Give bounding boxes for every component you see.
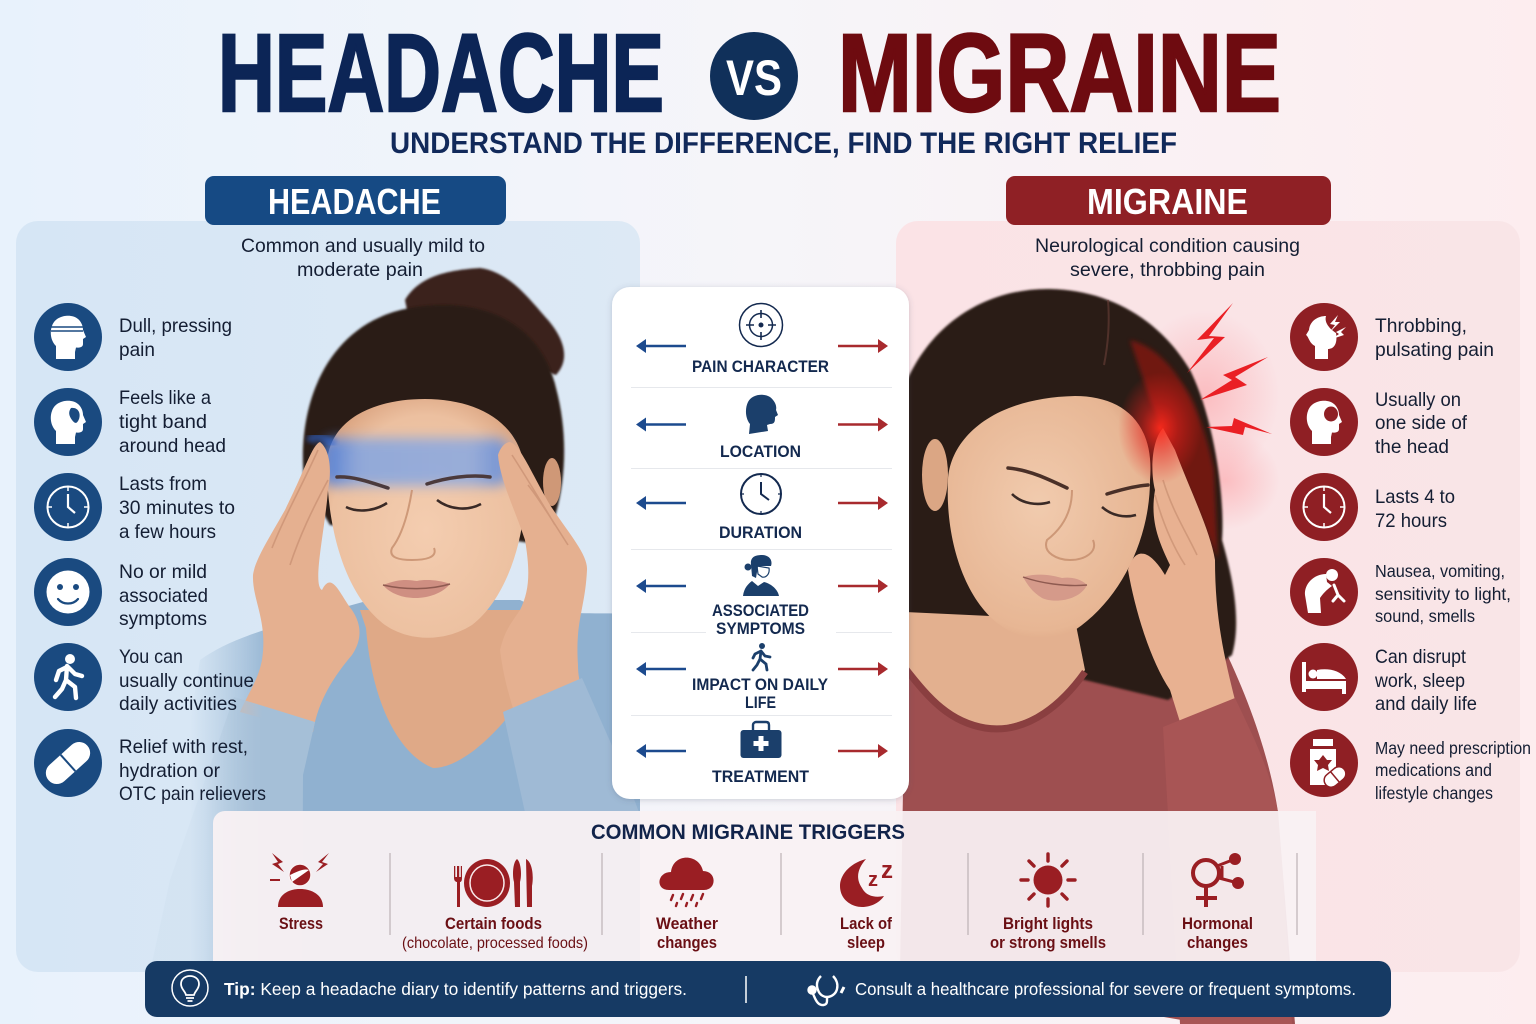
label: pain character: PAIN CHARACTER [692,357,829,376]
label: lack of sleep [840,914,892,952]
label: stress: Stress [279,914,323,933]
label: certain foods [402,914,588,952]
text: tight band: tight band [119,411,207,433]
label: lack of sleep: Lack of [840,914,892,933]
icon: walking person [34,643,102,711]
label: bright lights [990,914,1106,952]
icon: stress person [270,853,329,907]
icon: light bulb [172,970,208,1006]
icon: clock [741,474,781,514]
icon: plate and cutlery [454,859,533,907]
text: tight band [119,387,226,457]
text: nausea: sensitivity to light, [1375,584,1511,604]
icon: smiley [34,558,102,626]
badge: VS: VS [726,50,782,106]
heading: migraine pill: MIGRAINE [1087,181,1248,222]
icon: stethoscope [808,976,844,1005]
label: lack of sleep: sleep [847,933,885,952]
text: throbbing: Throbbing, [1375,315,1467,337]
icon: medication bottle [1290,729,1358,797]
text: disrupt: work, sleep [1374,670,1465,692]
text: prescription: lifestyle changes [1375,783,1493,803]
text: 4 to 72 hours [1375,486,1455,532]
label: location: LOCATION [720,442,801,461]
icon: target [740,304,782,346]
icon: rain cloud [659,858,714,906]
label: duration: DURATION [719,523,802,542]
icon: walking person [753,643,770,670]
icon: head with one-side spot [1290,388,1358,456]
text: dull pressing pain [119,315,232,361]
text: throbbing: pulsating pain [1375,339,1494,361]
icon: lightning bolts [1187,303,1272,435]
icon: clock [34,473,102,541]
text: tight band: Feels like a [119,387,211,409]
headache description [241,235,485,281]
text: relief [119,736,266,805]
text: one side: Usually on [1375,389,1461,411]
text: associated symptoms: No or mild [119,561,207,583]
text: nausea: sound, smells [1375,606,1475,626]
subtitle: UNDERSTAND THE DIFFERENCE, FIND THE RIGHT RELIEF [390,127,1177,160]
text: one side: one side of [1375,412,1468,434]
text: nausea [1375,561,1511,626]
migraine description [1035,235,1300,281]
label: impact on daily life [692,675,829,712]
label: weather changes: changes [657,933,717,952]
label: associated symptoms: SYMPTOMS [716,619,805,638]
panel: migraine features [1290,303,1531,803]
heading: triggers: COMMON MIGRAINE TRIGGERS [591,821,905,844]
text: prescription [1375,738,1531,803]
text: daily activities [119,646,254,715]
headache description: Common and usually mild to [241,235,485,257]
heading: migraine pill [1006,176,1331,225]
icon: head with lightning [1290,303,1358,371]
headache description: moderate pain [297,259,423,281]
label: bright lights: Bright lights [1003,914,1093,933]
panel: tip bar [145,961,1391,1017]
icon: head with pressure spot [34,388,102,456]
text: duration: 30 minutes to [119,497,235,519]
text: duration: a few hours [119,521,216,543]
icon: person bent over [1290,558,1358,626]
panel: common migraine triggers [213,811,1316,961]
text: disrupt: Can disrupt [1375,646,1467,668]
panel: headache features [34,303,266,805]
text: associated symptoms: symptoms [119,608,207,630]
icon: moon and zzz: z [881,857,893,884]
text: tip: Tip: Keep a headache diary to identify patterns and triggers. [224,979,687,999]
text: prescription: medications and [1375,760,1492,780]
text: dull pressing pain: Dull, pressing [119,315,232,337]
text: daily activities: usually continue [119,670,254,692]
label: weather changes: Weather [656,914,718,933]
label: hormonal changes [1182,914,1253,952]
text: relief: hydration or [119,760,220,782]
text: daily activities: daily activities [119,693,237,715]
badge: VS [710,32,798,120]
text: duration: Lasts from [119,473,207,495]
icon: sun [1021,854,1075,906]
label: weather changes [656,914,718,952]
text: relief: Relief with rest, [119,736,248,758]
label: impact on daily life: LIFE [745,693,776,712]
icon: head silhouette [746,395,778,434]
portrait: woman with tension headache [150,268,640,972]
label: hormonal changes: changes [1187,933,1248,952]
text: one side: the head [1375,436,1449,458]
text: tight band: around head [119,435,226,457]
icon: first aid kit [740,722,782,758]
arrows: headache side [636,339,686,758]
text: daily activities: You can [119,646,183,668]
label: treatment: TREATMENT [712,767,810,786]
migraine description: severe, throbbing pain [1070,259,1265,281]
panel: comparison card [612,287,909,799]
text: one side [1375,389,1468,458]
panel: headache background [16,221,640,972]
icon: woman with hand to head [743,555,779,596]
icon: moon and zzz [840,857,893,907]
text: nausea: Nausea, vomiting, [1375,561,1505,581]
text: consult: Consult a healthcare professional for severe or frequent symptoms. [855,979,1356,999]
heading: headache pill: HEADACHE [268,181,441,222]
icon: bed [1290,643,1358,711]
icon: head with band [34,303,102,371]
icon: hormone molecule [1193,853,1244,907]
title: migraine: MIGRAINE [838,12,1281,135]
text: 4 to 72 hours: 72 hours [1375,510,1447,532]
text: associated symptoms: associated [119,585,208,607]
text: associated symptoms [119,561,208,630]
label: associated symptoms [712,601,809,638]
text: throbbing [1375,315,1494,361]
text: dull pressing pain: pain [119,339,155,361]
label: certain foods: (chocolate, processed foods) [402,935,588,952]
text: 4 to 72 hours: Lasts 4 to [1375,486,1455,508]
portrait: woman with migraine [900,289,1295,1024]
text: disrupt: and daily life [1375,693,1477,715]
icon: clock [1290,473,1358,541]
text: relief: OTC pain relievers [119,783,266,805]
panel: migraine background [896,221,1520,972]
text: disrupt [1374,646,1477,715]
arrows: migraine side [838,339,888,758]
icon: capsule [34,729,102,797]
title: headache: HEADACHE [218,12,664,135]
label: bright lights: or strong smells [990,933,1106,952]
icon: moon and zzz: z [868,869,878,891]
label: hormonal changes: Hormonal [1182,914,1253,933]
label: associated symptoms: ASSOCIATED [712,601,809,620]
text: duration [119,473,235,543]
label: impact on daily life: IMPACT ON DAILY [692,675,829,694]
migraine description: Neurological condition causing [1035,235,1300,257]
heading: headache pill [205,176,506,225]
label: certain foods: Certain foods [445,914,542,933]
